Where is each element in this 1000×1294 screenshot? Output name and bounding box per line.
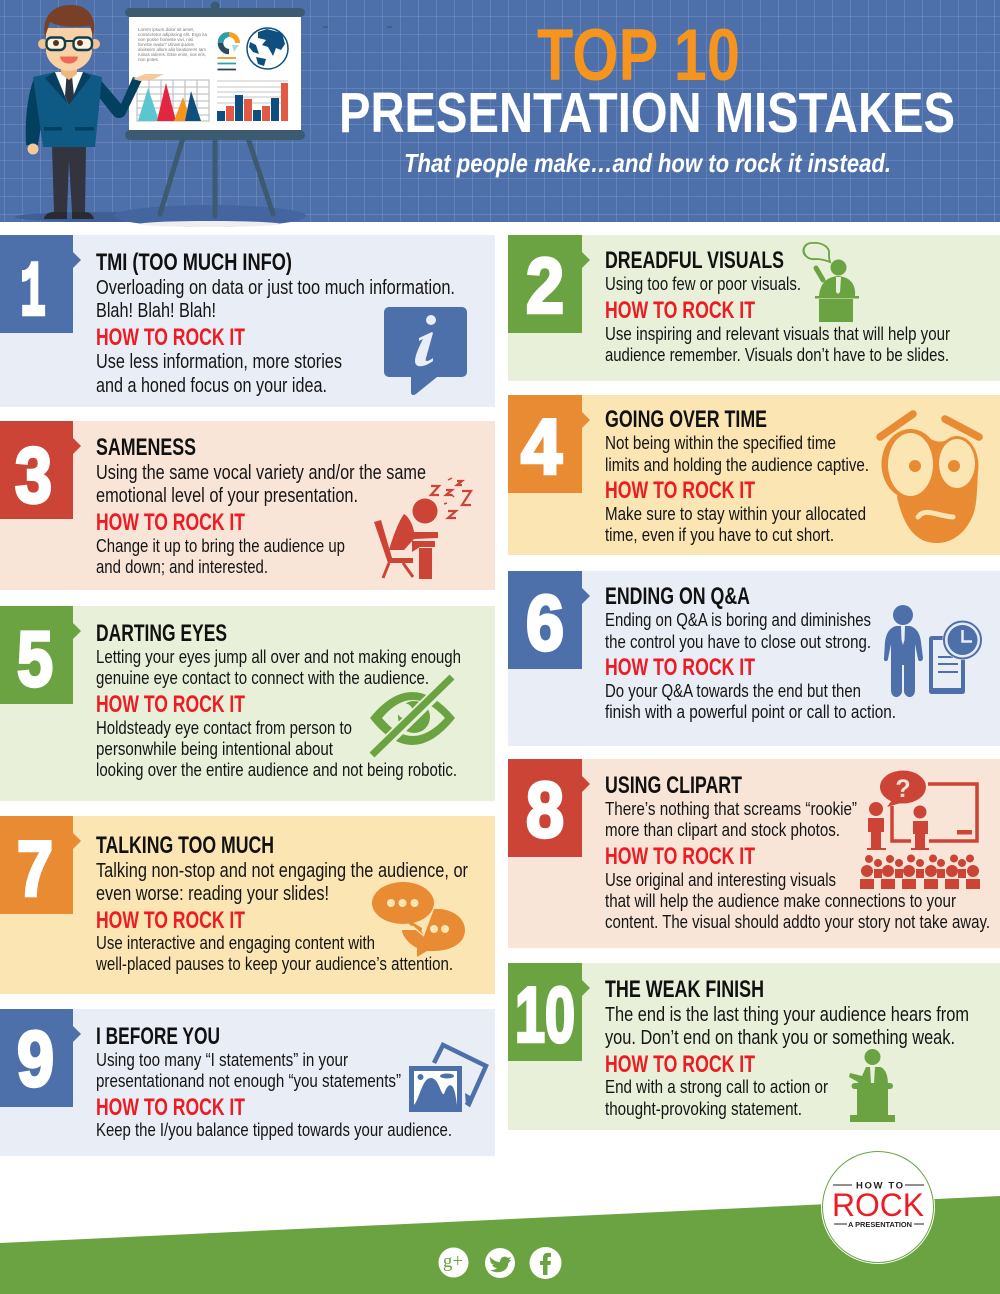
- number badge 2: 2: [526, 242, 564, 330]
- icon: speaker at podium with speech bubble: [803, 243, 859, 322]
- number badge 5: 5: [17, 614, 53, 702]
- heading: USING CLIPART: [605, 772, 742, 799]
- panel 7: Talking too much: [0, 816, 495, 994]
- how to rock it: HOW TO ROCK IT: [605, 477, 755, 504]
- advice text: Holdsteady eye contact from person to: [96, 717, 352, 738]
- heading: SAMENESS: [96, 434, 196, 461]
- how to rock it: HOW TO ROCK IT: [96, 509, 245, 536]
- advice text: finish with a powerful point or call to action.: [605, 701, 896, 722]
- advice text: personwhile being intentional about: [96, 738, 333, 759]
- advice text: [96, 717, 457, 780]
- how to rock it: HOW TO ROCK IT: [605, 297, 755, 324]
- illustration: presentation easel with charts: Lorem ipsum dolor sit amet,: [138, 27, 194, 32]
- mistake text: Not being within the specified time: [605, 432, 836, 453]
- illustration: presentation easel with charts: ruinas videres. Esse enim, nos eris,: [138, 52, 206, 57]
- mistake text: presentationand not enough “you statements”: [96, 1070, 401, 1091]
- illustration: presenter with glasses: [26, 5, 164, 219]
- advice text: Use interactive and engaging content with: [96, 932, 375, 953]
- icon: stacked pictures: [409, 1045, 486, 1112]
- number badge 3: [0, 421, 81, 519]
- mistake text: emotional level of your presentation.: [96, 485, 358, 507]
- icon: worried face: [880, 414, 979, 543]
- panel 9: I before you: [0, 1009, 495, 1156]
- panel 10: The weak finish: [508, 963, 1000, 1130]
- icon: businessman with clock and document: [884, 605, 982, 697]
- mistake text: Overloading on data or just too much information.: [96, 277, 455, 299]
- advice text: thought-provoking statement.: [605, 1098, 802, 1119]
- icon: Google Plus: g+: [443, 1251, 463, 1272]
- subtitle: That people make…and how to rock it instead.: [404, 148, 891, 178]
- mistake text: even worse: reading your slides!: [96, 883, 329, 905]
- mistake text: [605, 798, 857, 840]
- advice text: Keep the I/you balance tipped towards your audience.: [96, 1119, 452, 1140]
- mistake text: [96, 462, 426, 507]
- how to rock it: HOW TO ROCK IT: [605, 654, 755, 681]
- number badge 8: [508, 759, 590, 857]
- footer band: [0, 1150, 1000, 1294]
- illustration: presentation easel with charts: dixissem allum alio beatiorem! Iam: [138, 47, 206, 52]
- heading: TALKING TOO MUCH: [96, 832, 274, 859]
- icon: Google Plus: [438, 1248, 468, 1278]
- advice text: looking over the entire audience and not being robotic.: [96, 759, 457, 780]
- number badge 6: [508, 571, 590, 669]
- advice text: [605, 680, 896, 722]
- advice text: Use less information, more stories: [96, 351, 342, 373]
- heading: GOING OVER TIME: [605, 406, 767, 433]
- how to rock it: HOW TO ROCK IT: [96, 324, 245, 351]
- illustration: presentation easel with charts: honeste vivatur? Utinam quidem: [138, 42, 194, 47]
- mistake text: [96, 860, 468, 905]
- panel 6: Ending on Q&A: [508, 571, 1000, 746]
- how to rock it: HOW TO ROCK IT: [96, 691, 245, 718]
- header banner: [0, 0, 1000, 227]
- number badge 1: [0, 235, 81, 338]
- advice text: [95, 932, 453, 974]
- mistake text: limits and holding the audience captive.: [605, 454, 869, 475]
- how to rock it: HOW TO ROCK IT: [96, 907, 245, 934]
- icon: eye crossed out: [370, 677, 455, 757]
- number badge 1: 1: [20, 250, 46, 338]
- how to rock it: HOW TO ROCK IT: [605, 1051, 755, 1078]
- illustration: presentation easel with charts: non potes.: [138, 57, 159, 62]
- number badge 3: 3: [15, 431, 52, 519]
- advice text: End with a strong call to action or: [605, 1076, 828, 1097]
- illustration: presentation easel with charts: non posse honeste vivi, nisi: [138, 37, 193, 42]
- mistake text: Blah! Blah! Blah!: [96, 300, 216, 322]
- advice text: [605, 869, 990, 932]
- panel 5: Darting eyes: [0, 606, 495, 801]
- logo: How to Rock a Presentation: ROCK: [832, 1187, 924, 1223]
- logo: How to Rock a Presentation: HOW TO: [856, 1180, 903, 1192]
- advice text: [605, 503, 866, 545]
- advice text: [96, 351, 342, 397]
- advice text: Use original and interesting visuals: [605, 869, 836, 890]
- advice text: Change it up to bring the audience up: [96, 535, 345, 556]
- panel 2: Dreadful visuals: [508, 235, 1000, 381]
- how to rock it: HOW TO ROCK IT: [605, 843, 755, 870]
- mistake text: [96, 277, 455, 322]
- icon: overlapping chat bubbles: [372, 882, 465, 957]
- number badge 2: [508, 235, 590, 333]
- advice text: well-placed pauses to keep your audience’s attention.: [95, 953, 453, 974]
- mistake text: Using the same vocal variety and/or the same: [96, 462, 426, 484]
- heading: THE WEAK FINISH: [605, 976, 764, 1003]
- icon: info speech bubble: [384, 307, 467, 395]
- advice text: [96, 535, 345, 577]
- mistake text: the control you have to close out strong.: [605, 631, 871, 652]
- mistake text: more than clipart and stock photos.: [605, 819, 840, 840]
- illustration: presentation easel with charts: [125, 2, 305, 216]
- advice text: Do your Q&A towards the end but then: [605, 680, 861, 701]
- mistake text: Using too many “I statements” in your: [96, 1049, 348, 1070]
- number badge 9: [0, 1009, 81, 1107]
- mistake text: Talking non-stop and not engaging the audience, or: [96, 860, 468, 882]
- advice text: and a honed focus on your idea.: [96, 375, 327, 397]
- heading: TMI (TOO MUCH INFO): [96, 249, 292, 276]
- advice text: [605, 323, 950, 365]
- number badge 6: 6: [526, 578, 564, 666]
- advice text: time, even if you have to cut short.: [605, 524, 834, 545]
- mistake text: Letting your eyes jump all over and not making enough: [96, 646, 461, 667]
- icon: classroom with teacher, student and audience: [860, 770, 980, 889]
- mistake text: [605, 609, 871, 652]
- panel 4: Going over time: [508, 395, 1000, 555]
- icon: speaker at lectern: [849, 1049, 895, 1122]
- icon: Twitter: [485, 1248, 515, 1278]
- advice text: and down; and interested.: [96, 556, 268, 577]
- icon: person asleep on chair: [374, 478, 471, 579]
- logo: How to Rock a Presentation: [821, 1150, 935, 1264]
- heading: ENDING ON Q&A: [605, 583, 750, 610]
- mistake text: [605, 1004, 969, 1049]
- how to rock it: HOW TO ROCK IT: [96, 1094, 245, 1121]
- mistake text: Using too few or poor visuals.: [605, 273, 801, 294]
- icon: Facebook: [530, 1247, 562, 1279]
- mistake text: [605, 432, 869, 475]
- logo: How to Rock a Presentation: A PRESENTATION: [848, 1222, 912, 1229]
- number badge 7: 7: [17, 824, 53, 912]
- title: TOP 10: TOP 10: [537, 15, 740, 96]
- mistake text: [96, 1049, 401, 1091]
- heading: I BEFORE YOU: [96, 1023, 220, 1050]
- number badge 9: 9: [17, 1014, 54, 1102]
- mistake text: [96, 646, 461, 688]
- advice text: Make sure to stay within your allocated: [605, 503, 866, 524]
- number badge 8: 8: [526, 766, 564, 854]
- heading: DARTING EYES: [96, 620, 227, 647]
- mistake text: There’s nothing that screams “rookie”: [605, 798, 857, 819]
- illustration: presentation easel with charts: consectetur adipiscing elit. Ergo ita: [138, 32, 207, 37]
- number badge 7: [0, 816, 81, 914]
- panel 3: Sameness: [0, 421, 495, 590]
- panel 8: Using clipart: [508, 759, 1000, 948]
- heading: DREADFUL VISUALS: [605, 247, 784, 274]
- advice text: [605, 1076, 828, 1119]
- number badge 10: 10: [515, 970, 575, 1058]
- icon: classroom with teacher, student and audience: ?: [895, 775, 911, 803]
- panel 1: TMI: [0, 235, 495, 407]
- number badge 4: [508, 395, 590, 493]
- mistake text: genuine eye contact to connect with the audience.: [96, 667, 429, 688]
- mistake text: Ending on Q&A is boring and diminishes: [605, 609, 871, 630]
- number badge 5: [0, 606, 81, 704]
- number badge 4: 4: [521, 402, 562, 490]
